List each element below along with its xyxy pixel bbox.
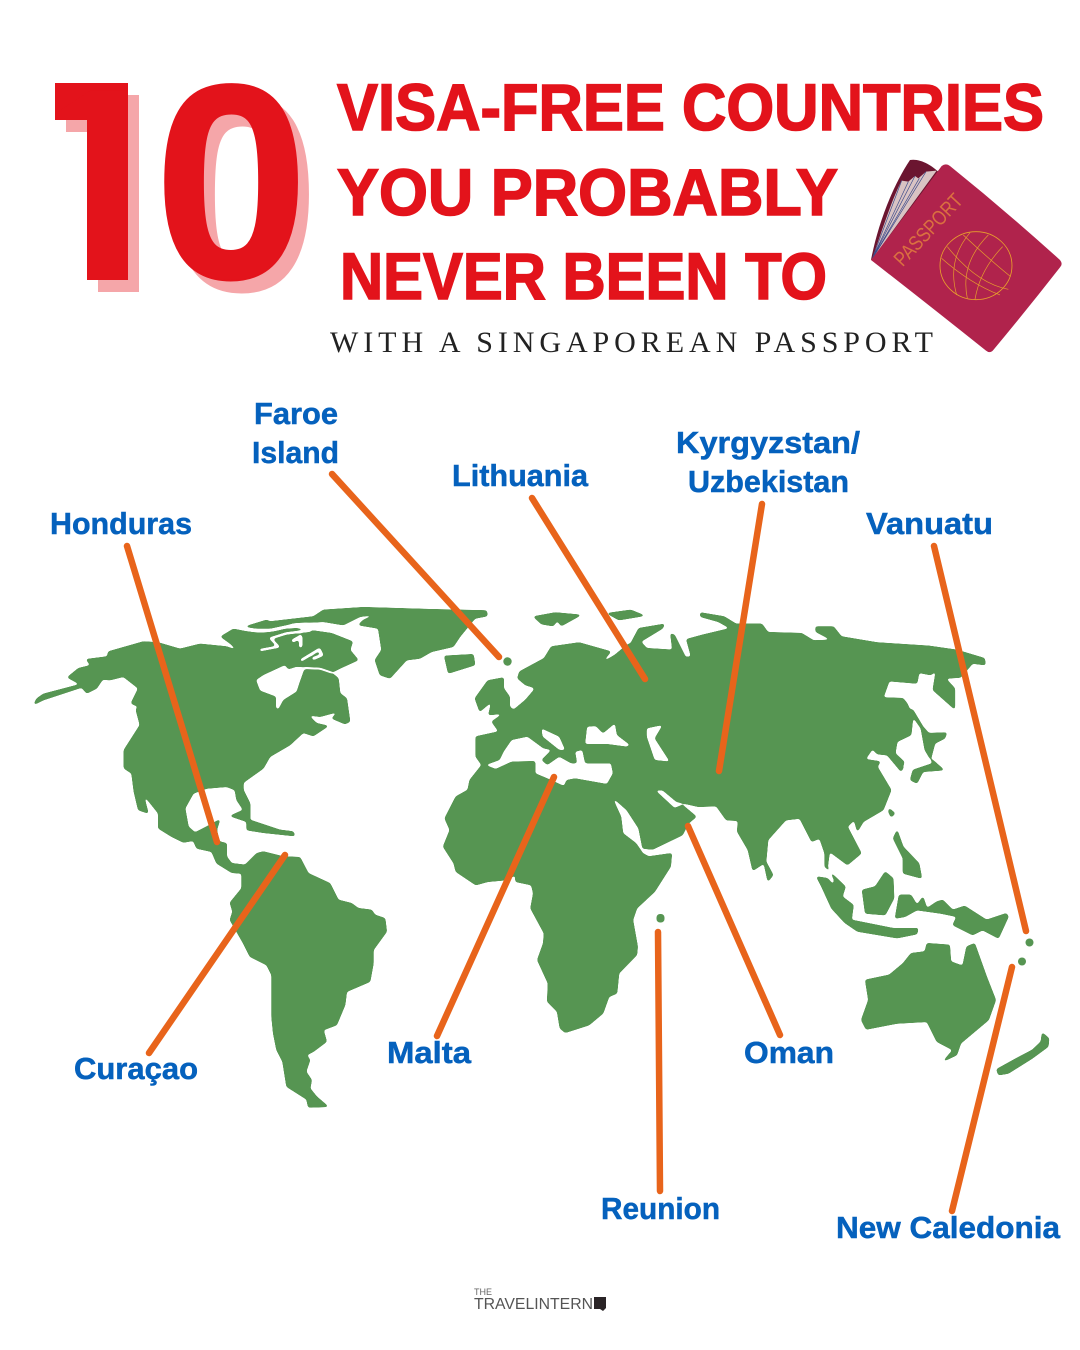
- taiwan: [888, 808, 895, 817]
- title: NEVER BEEN TO: [340, 239, 827, 313]
- label: Faroe Island: [252, 396, 339, 470]
- leader lines: [127, 474, 1026, 1211]
- vanuatu marker: [1026, 938, 1034, 946]
- japan: [907, 708, 947, 783]
- big number 10 with shadow: 0: [154, 26, 309, 337]
- title: YOU PROBABLY: [337, 155, 838, 229]
- label: Oman: Oman: [744, 1035, 834, 1070]
- label: Faroe Island: Faroe: [254, 396, 338, 431]
- new caledonia marker: [1018, 958, 1026, 966]
- logo: The Travel Intern: TRAVELINTERN: [474, 1296, 593, 1313]
- north and south america: [34, 628, 387, 1107]
- label: Kyrgyzstan/Uzbekistan: Kyrgyzstan/: [676, 425, 860, 460]
- label: Malta: Malta: [387, 1035, 472, 1070]
- logo: The Travel Intern: [474, 1287, 606, 1313]
- map: africa and eurasia: [443, 613, 985, 1033]
- label: Kyrgyzstan/Uzbekistan: [676, 425, 860, 499]
- faroe island marker: [503, 657, 512, 666]
- iceland: [444, 654, 475, 673]
- title: [337, 70, 1044, 313]
- label: Reunion: Reunion: [601, 1191, 720, 1226]
- arctic and greenland: [245, 607, 487, 678]
- svalbard: [533, 613, 581, 626]
- borneo: [862, 872, 894, 915]
- big number 10 with shadow: [55, 83, 309, 294]
- label: New Caledonia: New Caledonia: [836, 1210, 1061, 1245]
- label: Honduras: Honduras: [50, 506, 192, 541]
- reunion marker: [656, 914, 664, 922]
- big number 10 with shadow: 1: [35, 44, 188, 351]
- label: Kyrgyzstan/Uzbekistan: Uzbekistan: [688, 464, 849, 499]
- icon: passport: [871, 160, 1062, 352]
- australia: [861, 943, 996, 1062]
- subtitle: WITH A SINGAPOREAN PASSPORT: [330, 326, 933, 359]
- big number 10 with shadow: 1: [24, 32, 177, 339]
- label: Curaçao: Curaçao: [74, 1051, 198, 1086]
- label: Vanuatu: Vanuatu: [866, 506, 993, 541]
- afro-eurasia landmass: [443, 613, 985, 1033]
- sulawesi and new guinea: [895, 895, 1008, 938]
- label: Faroe Island: Island: [252, 435, 339, 470]
- philippines: [893, 830, 922, 878]
- title: VISA-FREE COUNTRIES: [337, 70, 1044, 144]
- map: world map: [34, 607, 1049, 1107]
- franz josef land: [607, 610, 645, 620]
- map: islands: [533, 610, 1049, 1075]
- map: masked landmasses: [34, 607, 985, 1107]
- map: americas and greenland: [34, 607, 487, 1107]
- big number 10 with shadow: 0: [165, 38, 320, 349]
- icon: passport: PASSPORT: [889, 189, 968, 271]
- logo: The Travel Intern: THE: [474, 1287, 492, 1298]
- new zealand: [996, 1033, 1049, 1075]
- label: Lithuania: Lithuania: [452, 458, 589, 493]
